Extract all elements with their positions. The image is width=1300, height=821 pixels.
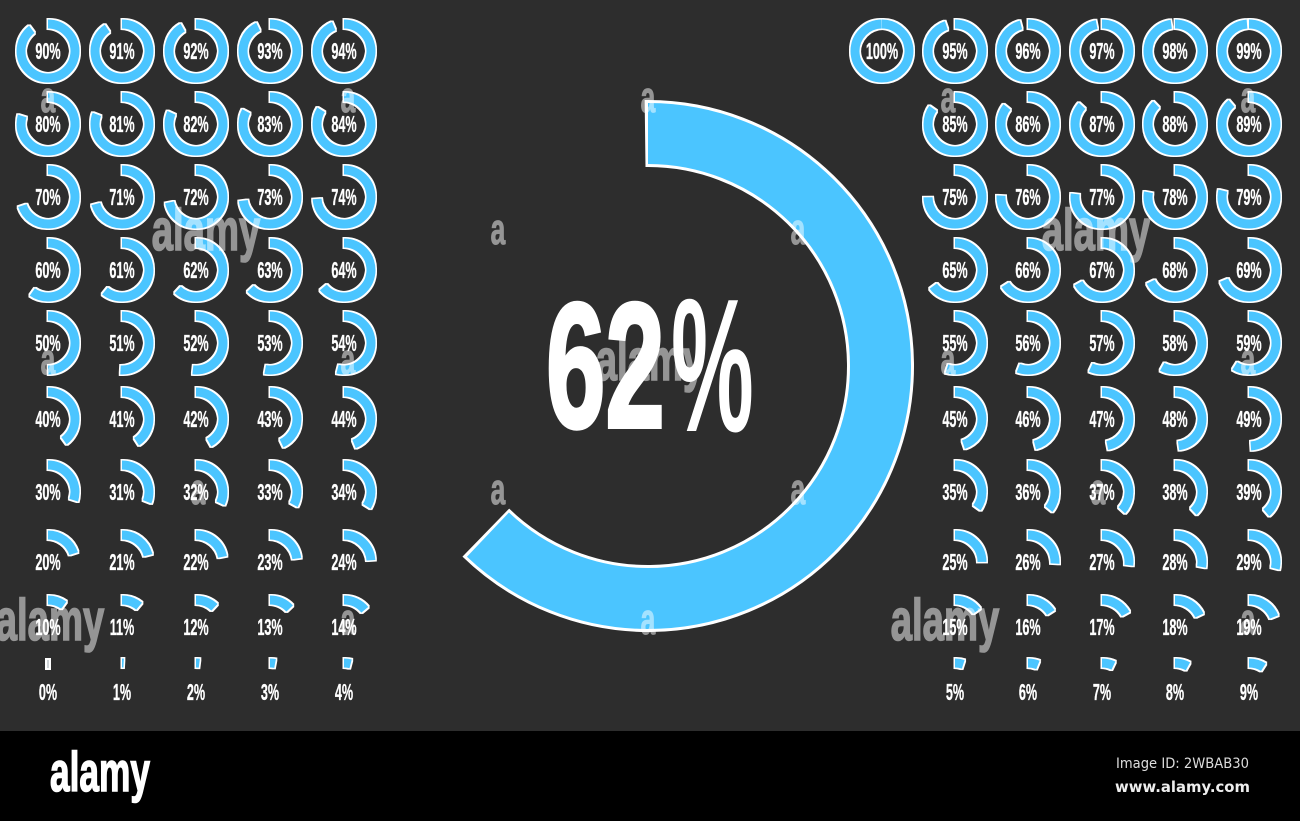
gauge 18%: 18% [1162,614,1188,640]
gauge 3%: 3% [261,679,279,705]
watermark words: alamy: alamy [891,589,1000,653]
footer image id: Image ID: 2WBAB30 [1116,756,1249,772]
gauge 19% [1222,600,1276,654]
gauge 36%: 36% [1015,479,1041,505]
gauge 67% [1075,243,1129,297]
gauge 59%: 59% [1236,330,1262,356]
gauge 74%: 74% [331,184,357,210]
gauge 11% [95,600,149,654]
gauge 69%: 69% [1236,257,1262,283]
main ring arc [413,131,883,601]
gauge 35%: 35% [942,479,968,505]
watermark letters: small a: a [941,334,956,384]
gauge 92%: 92% [183,38,209,64]
gauge 10%: 10% [35,614,61,640]
gauge 4% [317,663,371,717]
gauge 100%: 100% [866,38,898,64]
gauge 7%: 7% [1093,679,1111,705]
gauge 30% [21,465,75,519]
gauge 98%: 98% [1162,38,1188,64]
gauge 88%: 88% [1162,111,1188,137]
gauge 54% [317,316,371,370]
gauge 11%: 11% [110,614,134,640]
gauge 82% [169,97,223,151]
gauge 2% [169,663,223,717]
gauge 3% [243,663,297,717]
gauge 90% [21,24,75,78]
gauge 81%: 81% [109,111,135,137]
gauge 54%: 54% [331,330,357,356]
gauge 66% [1001,243,1055,297]
gauge 47%: 47% [1089,406,1115,432]
watermark letters: small a: a [1241,334,1256,384]
gauge 86%: 86% [1015,111,1041,137]
gauge 71% [95,170,149,224]
gauge 44% [317,392,371,446]
gauge 14%: 14% [331,614,357,640]
gauge 37%: 37% [1089,479,1115,505]
gauge 42% [169,392,223,446]
gauge 55%: 55% [942,330,968,356]
gauge 51%: 51% [109,330,135,356]
gauge 95% [928,24,982,78]
gauge 66%: 66% [1015,257,1041,283]
panel: right gauge grid [855,24,1276,717]
gauge 22%: 22% [183,549,209,575]
gauge 97%: 97% [1089,38,1115,64]
gauge 33% [243,465,297,519]
gauge 89%: 89% [1236,111,1262,137]
gauge 9%: 9% [1240,679,1258,705]
watermark letters: small a [41,72,1256,644]
gauge 76% [1001,170,1055,224]
watermark letters: small a: a [641,72,656,122]
watermark letters: small a: a [1241,594,1256,644]
gauge 15% [928,600,982,654]
gauge 30%: 30% [35,479,61,505]
gauge 94% [317,24,371,78]
gauge 26%: 26% [1015,549,1041,575]
watermark letters: small a: a [341,334,356,384]
gauge 65%: 65% [942,257,968,283]
gauge 8%: 8% [1166,679,1184,705]
gauge 12%: 12% [183,614,209,640]
watermark letters: small a: a [491,464,506,514]
gauge 83%: 83% [257,111,283,137]
gauge 50% [21,316,75,370]
watermark pattern [0,72,1256,653]
gauge 94%: 94% [331,38,357,64]
gauge 79%: 79% [1236,184,1262,210]
gauge 13% [243,600,297,654]
gauge 5% [928,663,982,717]
gauge 68%: 68% [1162,257,1188,283]
gauge 38% [1148,465,1202,519]
gauge 61%: 61% [109,257,135,283]
gauge 43%: 43% [257,406,283,432]
gauge 79% [1222,170,1276,224]
gauge 46%: 46% [1015,406,1041,432]
gauge 28% [1148,535,1202,589]
gauge 93%: 93% [257,38,283,64]
gauge 97% [1075,24,1129,78]
watermark letters: small a: a [791,204,806,254]
gauge 17%: 17% [1089,614,1115,640]
gauge 63% [243,243,297,297]
gauge 22% [169,535,223,589]
gauge 42%: 42% [183,406,209,432]
gauge 23%: 23% [257,549,283,575]
gauge 72%: 72% [183,184,209,210]
gauge 70%: 70% [35,184,61,210]
gauge 16% [1001,600,1055,654]
gauge 57% [1075,316,1129,370]
gauge 72% [169,170,223,224]
gauge 29%: 29% [1236,549,1262,575]
gauge 59% [1222,316,1276,370]
gauge 71%: 71% [109,184,135,210]
gauge 43% [243,392,297,446]
gauge 24%: 24% [331,549,357,575]
watermark letters: small a: a [1241,72,1256,122]
gauge 57%: 57% [1089,330,1115,356]
gauge 87%: 87% [1089,111,1115,137]
gauge 6%: 6% [1019,679,1037,705]
gauge 20% [21,535,75,589]
gauge 70% [21,170,75,224]
gauge 17% [1075,600,1129,654]
watermark letters: small a: a [491,204,506,254]
watermark letters: small a: a [641,594,656,644]
gauge 83% [243,97,297,151]
gauge 77%: 77% [1089,184,1115,210]
watermark words: alamy [0,199,1151,653]
gauge 8% [1148,663,1202,717]
gauge 45%: 45% [942,406,968,432]
gauge 53% [243,316,297,370]
gauge 48%: 48% [1162,406,1188,432]
gauge 64%: 64% [331,257,357,283]
gauge 80%: 80% [35,111,61,137]
gauge 9% [1222,663,1276,717]
gauge 62% [169,243,223,297]
footer bar [0,731,1300,821]
gauge 60% [21,243,75,297]
gauge 39%: 39% [1236,479,1262,505]
gauge 50%: 50% [35,330,61,356]
gauge 21% [95,535,149,589]
gauge 77% [1075,170,1129,224]
gauge 33%: 33% [257,479,283,505]
gauge 56%: 56% [1015,330,1041,356]
gauge 29% [1222,535,1276,589]
gauge 6% [1001,663,1055,717]
gauge 58%: 58% [1162,330,1188,356]
gauge 26% [1001,535,1055,589]
gauge 5%: 5% [946,679,964,705]
gauge 28%: 28% [1162,549,1188,575]
gauge 7% [1075,663,1129,717]
gauge 32% [169,465,223,519]
gauge 81% [95,97,149,151]
gauge 73% [243,170,297,224]
gauge 40%: 40% [35,406,61,432]
watermark letters: small a: a [941,72,956,122]
gauge 74% [317,170,371,224]
gauge 15%: 15% [942,614,968,640]
gauge 91% [95,24,149,78]
gauge 1% [95,663,149,717]
gauge 36% [1001,465,1055,519]
gauge 25% [928,535,982,589]
gauge 34% [317,465,371,519]
gauge 34%: 34% [331,479,357,505]
watermark letters: small a: a [791,464,806,514]
gauge 75%: 75% [942,184,968,210]
watermark letters: small a: a [41,72,56,122]
gauge 25%: 25% [942,549,968,575]
gauge 82%: 82% [183,111,209,137]
gauge 40% [21,392,75,446]
gauge 58% [1148,316,1202,370]
gauge 65% [928,243,982,297]
gauge 52% [169,316,223,370]
gauge 10% [21,600,75,654]
gauge 64% [317,243,371,297]
watermark words: alamy: alamy [152,199,261,263]
footer logo: alamy: alamy [50,741,150,803]
gauge 35% [928,465,982,519]
panel: left gauge grid [21,24,371,717]
gauge 31%: 31% [109,479,135,505]
gauge 31% [95,465,149,519]
watermark letters: small a: a [41,334,56,384]
gauge 87% [1075,97,1129,151]
gauge 93% [243,24,297,78]
gauge 68% [1148,243,1202,297]
gauge 48% [1148,392,1202,446]
gauge 84% [317,97,371,151]
gauge 0%: 0% [39,679,57,705]
gauge 84%: 84% [331,111,357,137]
main value 62%: 62 [546,267,665,466]
gauge 61% [95,243,149,297]
gauge 16%: 16% [1015,614,1041,640]
gauge 85%: 85% [942,111,968,137]
gauge 95%: 95% [942,38,968,64]
gauge 13%: 13% [257,614,283,640]
gauge 80% [21,97,75,151]
gauge 96%: 96% [1015,38,1041,64]
gauge 73%: 73% [257,184,283,210]
gauge 46% [1001,392,1055,446]
gauge 96% [1001,24,1055,78]
gauge 100% [855,24,909,78]
watermark letters: small a: a [1091,464,1106,514]
gauge 20%: 20% [35,549,61,575]
gauge 49%: 49% [1236,406,1262,432]
watermark words: alamy: alamy [596,329,705,393]
gauge 51% [95,316,149,370]
gauge 67%: 67% [1089,257,1115,283]
gauge 24% [317,535,371,589]
gauge 76%: 76% [1015,184,1041,210]
gauge 41% [95,392,149,446]
gauge 39% [1222,465,1276,519]
gauge 88% [1148,97,1202,151]
gauge 49% [1222,392,1276,446]
gauge 44%: 44% [331,406,357,432]
gauge 63%: 63% [257,257,283,283]
footer website: www.alamy.com [1115,778,1250,796]
watermark letters: small a: a [191,464,206,514]
gauge 98% [1148,24,1202,78]
gauge 21%: 21% [109,549,135,575]
gauge 2%: 2% [187,679,205,705]
gauge 85% [928,97,982,151]
gauge 1%: 1% [113,679,131,705]
gauge 86% [1001,97,1055,151]
gauge 53%: 53% [257,330,283,356]
gauge 4%: 4% [335,679,353,705]
gauge 14% [317,600,371,654]
gauge 23% [243,535,297,589]
gauge 12% [169,600,223,654]
gauge 38%: 38% [1162,479,1188,505]
gauge 56% [1001,316,1055,370]
gauge 27%: 27% [1089,549,1115,575]
gauge 27% [1075,535,1129,589]
gauge 37% [1075,465,1129,519]
gauge 92% [169,24,223,78]
gauge 78% [1148,170,1202,224]
main gauge 62% [413,131,883,601]
gauge 55% [928,316,982,370]
main value 62% [546,260,754,472]
gauge 91%: 91% [109,38,135,64]
watermark letters: small a: a [341,72,356,122]
gauge 0% [39,658,57,705]
main value 62%: % [671,260,754,472]
gauge 41%: 41% [109,406,135,432]
gauge 90%: 90% [35,38,61,64]
gauge 99%: 99% [1236,38,1262,64]
watermark letters: small a: a [341,594,356,644]
gauge 19%: 19% [1236,614,1262,640]
gauge 78%: 78% [1162,184,1188,210]
gauge 18% [1148,600,1202,654]
gauge 89% [1222,97,1276,151]
gauge 32%: 32% [183,479,209,505]
gauge 75% [928,170,982,224]
gauge 99% [1222,24,1276,78]
gauge 69% [1222,243,1276,297]
watermark words: alamy: alamy [1042,199,1151,263]
gauge 47% [1075,392,1129,446]
gauge 60%: 60% [35,257,61,283]
gauge 52%: 52% [183,330,209,356]
gauge 62%: 62% [183,257,209,283]
gauge 45% [928,392,982,446]
